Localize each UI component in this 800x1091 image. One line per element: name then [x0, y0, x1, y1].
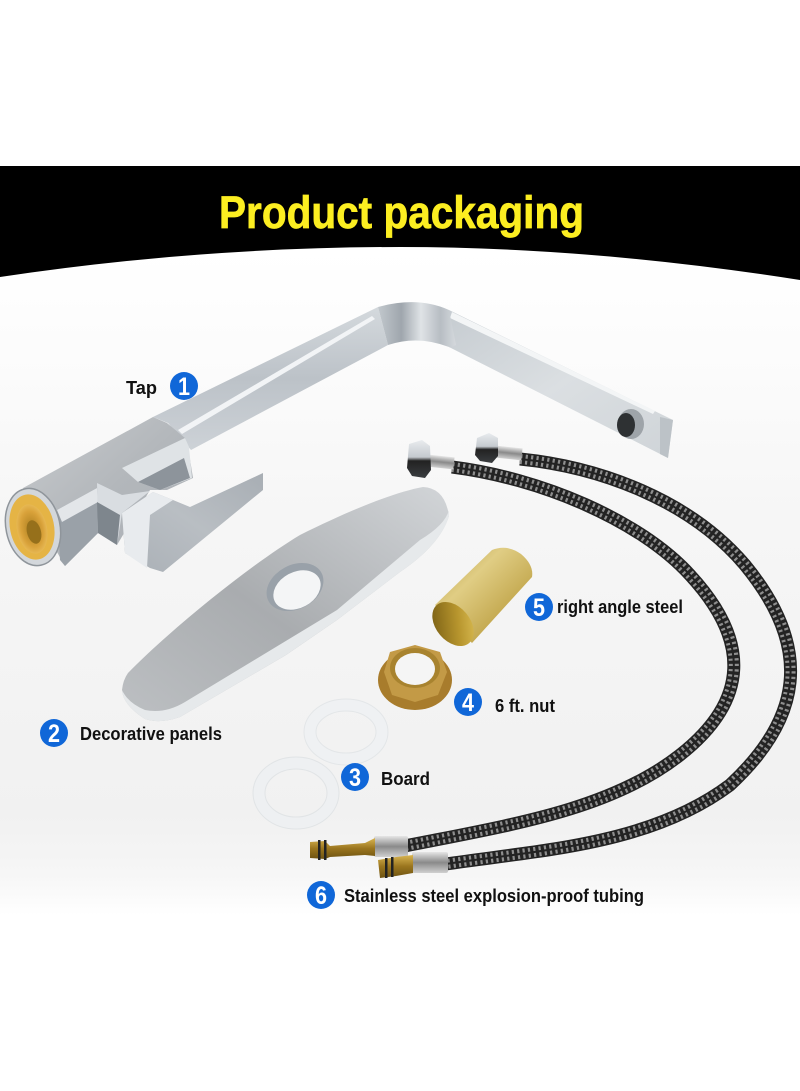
background [0, 250, 800, 915]
header banner [0, 166, 800, 280]
label: 6 ft. nut [454, 688, 555, 717]
icon: rubber rings [259, 705, 382, 823]
label: Tap: Tap [126, 378, 157, 398]
spout bend [378, 302, 456, 347]
icon: hose brass connectors bottom [310, 836, 448, 878]
label: Stainless steel explosion-proof tubing: 6 [315, 882, 327, 910]
label: Tap: 1 [178, 373, 190, 401]
icon: brass tube [424, 548, 532, 654]
hose outer [446, 459, 791, 864]
label: Tap [126, 372, 198, 401]
icon: tap faucet [0, 302, 673, 572]
label: Decorative panels [40, 719, 222, 748]
icon: hex nut [378, 645, 452, 710]
spout right arm [449, 310, 673, 458]
title: Product packaging [219, 187, 584, 238]
label: right angle steel: 5 [533, 594, 545, 622]
label: right angle steel: right angle steel [557, 597, 683, 617]
label: 6 ft. nut: 6 ft. nut [495, 696, 555, 716]
body [23, 417, 193, 566]
aerator [617, 409, 644, 439]
spout left arm [153, 307, 388, 450]
gold fitting [0, 483, 68, 571]
label: Board: Board [381, 769, 430, 789]
label: Board: 3 [349, 764, 361, 792]
label: Stainless steel explosion-proof tubing [307, 881, 644, 910]
icon: decorative panel [122, 487, 449, 721]
handle [122, 473, 263, 572]
label: Decorative panels: 2 [48, 720, 60, 748]
label: Decorative panels: Decorative panels [80, 724, 222, 744]
label: Board [341, 763, 430, 792]
label: Stainless steel explosion-proof tubing: Stainless steel explosion-proof tubing [344, 886, 644, 906]
icon: braided hoses [405, 459, 791, 864]
label: 6 ft. nut: 4 [462, 689, 474, 717]
icon: hose nut fittings top [407, 433, 523, 478]
hose inner [405, 467, 734, 846]
label: right angle steel [525, 593, 683, 622]
